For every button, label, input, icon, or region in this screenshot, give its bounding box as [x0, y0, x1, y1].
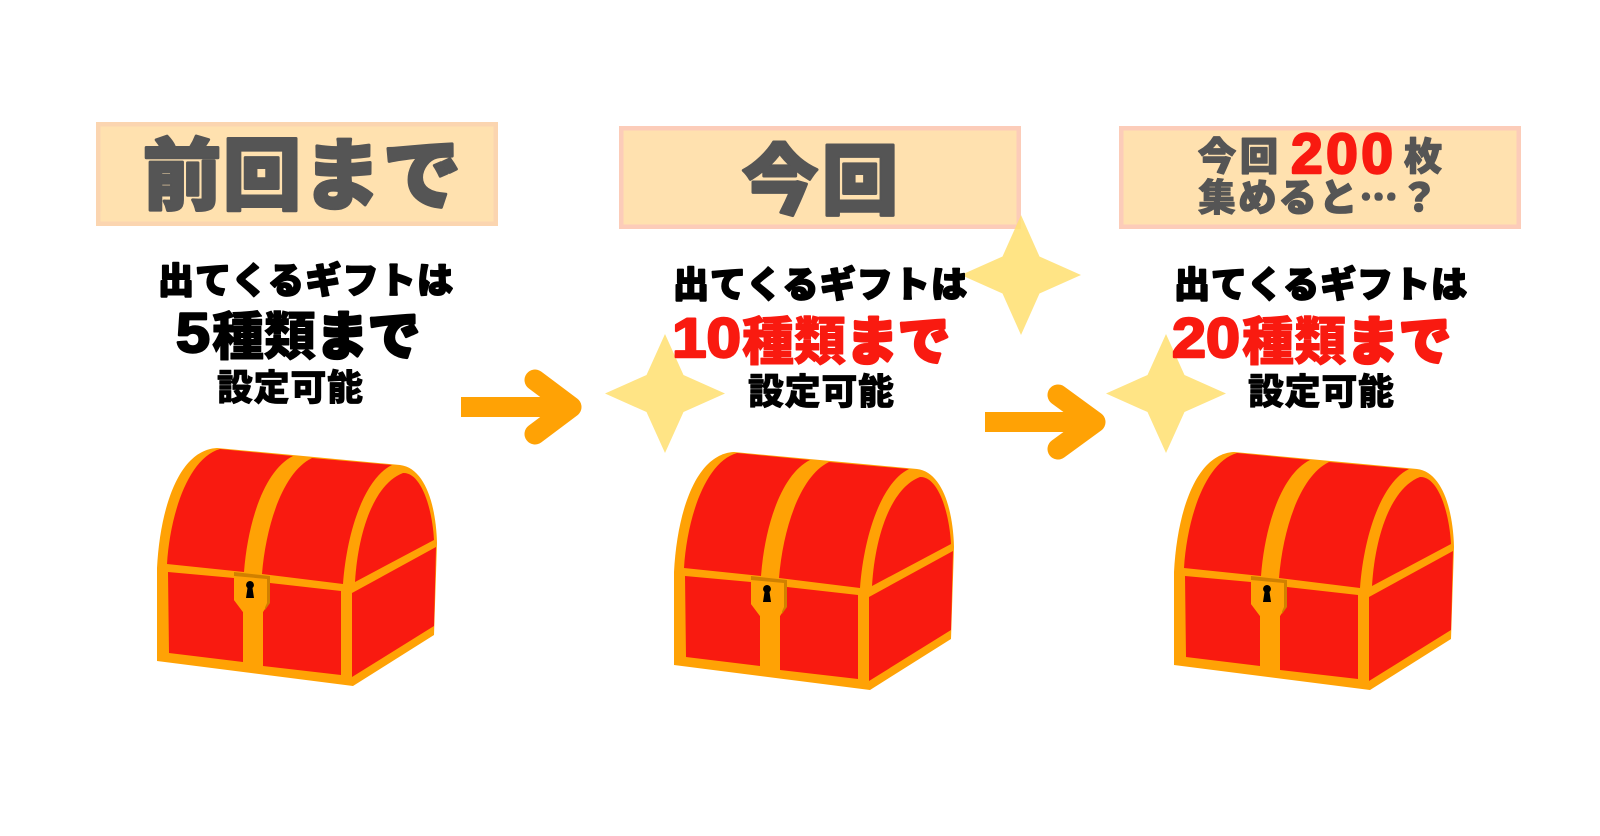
- text block: previous limit: 設定可能: [217, 367, 363, 408]
- arrow: current to 200 collected: [985, 395, 1095, 449]
- text block: previous limit: [158, 260, 453, 408]
- panel: current header box: [621, 128, 1019, 227]
- icon: sparkle right: [1106, 334, 1226, 453]
- text block: previous limit: 出てくるギフトは: [158, 260, 453, 301]
- heading: collect 200: [1198, 122, 1442, 222]
- text block: current limit: [672, 264, 967, 412]
- text block: previous limit: 5: [176, 301, 210, 364]
- text block: current limit: 10: [672, 306, 741, 369]
- heading: collect 200: 枚: [1404, 137, 1442, 179]
- panel: previous header box: [98, 124, 496, 224]
- icon: treasure chest current: [674, 452, 954, 690]
- text block: previous limit: 種類まで: [212, 309, 420, 367]
- text block: current limit: 出てくるギフトは: [673, 264, 967, 305]
- text block: 200 collected limit: 20: [1172, 306, 1240, 369]
- text block: 200 collected limit: 種類まで: [1242, 314, 1451, 372]
- text block: 200 collected limit: 設定可能: [1248, 371, 1394, 412]
- text block: 200 collected limit: [1172, 264, 1467, 412]
- icon: treasure chest 200 collected: [1174, 452, 1454, 690]
- arrow: previous to current: [461, 380, 571, 434]
- panel: 200 collected header box: [1121, 122, 1519, 227]
- icon: treasure chest previous: [157, 448, 437, 686]
- text block: 200 collected limit: 出てくるギフトは: [1174, 264, 1467, 305]
- text block: current limit: 種類まで: [742, 314, 950, 372]
- text block: current limit: 設定可能: [748, 371, 894, 412]
- icon: sparkle left: [605, 334, 725, 453]
- heading: collect 200: 集めると…？: [1198, 167, 1438, 222]
- icon: sparkle top: [961, 215, 1081, 335]
- heading: collect 200: 200: [1291, 122, 1393, 186]
- heading: previous: 前回まで: [143, 132, 461, 220]
- heading: current: 今回: [742, 140, 898, 225]
- heading: collect 200: 今回: [1198, 137, 1278, 179]
